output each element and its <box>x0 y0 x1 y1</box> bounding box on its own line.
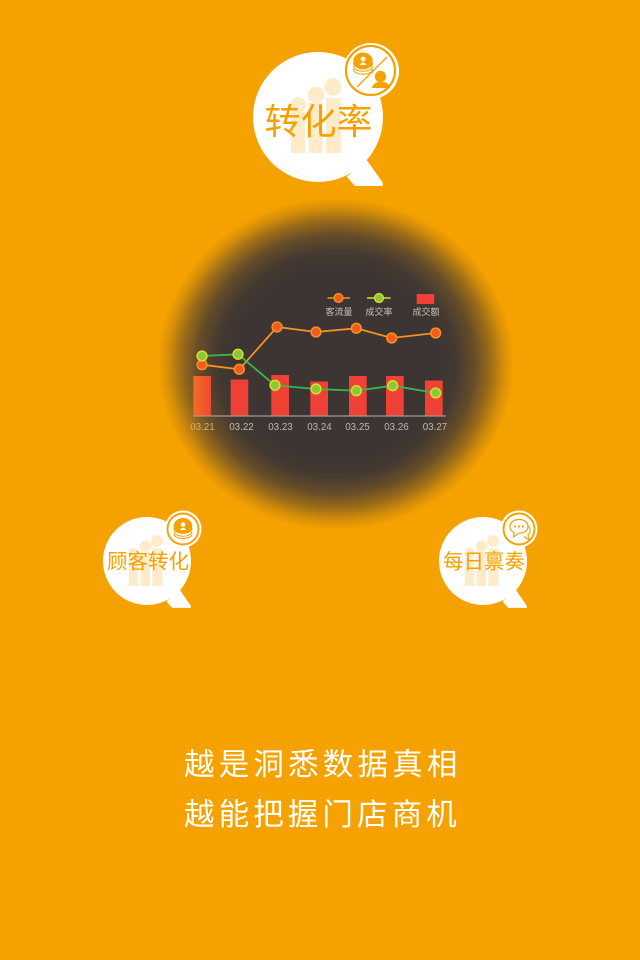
slogan line 2: 越能把握门店商机 <box>184 790 461 834</box>
badge: coins over person <box>343 43 399 99</box>
pale people bars <box>128 535 163 586</box>
bubble body <box>439 517 527 608</box>
date labels: 03.26 <box>384 422 409 433</box>
date labels: 03.27 <box>423 422 447 433</box>
axis <box>193 415 446 417</box>
slogan <box>184 740 462 834</box>
date labels: 03.24 <box>307 422 332 433</box>
legend: 客流量 <box>325 305 353 318</box>
heading: 转化率 <box>264 93 373 145</box>
bars <box>193 375 443 416</box>
pale people bars <box>464 535 499 586</box>
legend: 成交额 <box>412 305 440 318</box>
slogan line 1: 越是洞悉数据真相 <box>184 740 462 784</box>
date labels: 03.23 <box>268 422 293 433</box>
pale people bars <box>290 78 342 153</box>
dark blurred circle behind chart <box>158 198 514 530</box>
legend <box>325 294 440 318</box>
date labels: 03.22 <box>229 422 254 433</box>
bubble body <box>253 52 383 186</box>
heading: 每日禀奏 <box>443 544 525 574</box>
bubble body <box>103 517 191 608</box>
heading: 顾客转化 <box>107 544 189 574</box>
green line <box>197 349 441 398</box>
date labels <box>190 422 447 433</box>
badge: chat bubbles <box>500 510 538 548</box>
chart: 客流量 成交率 成交额 <box>190 294 447 433</box>
date labels: 03.25 <box>345 422 370 433</box>
legend: 成交率 <box>365 305 393 318</box>
badge: coins <box>164 510 202 548</box>
magnifier bubble: 每日禀奏 <box>439 510 538 608</box>
magnifier bubble: 转化率 <box>253 43 399 186</box>
date labels: 03.21 <box>190 422 215 433</box>
orange line <box>197 322 441 374</box>
magnifier bubble: 顾客转化 <box>103 510 202 608</box>
